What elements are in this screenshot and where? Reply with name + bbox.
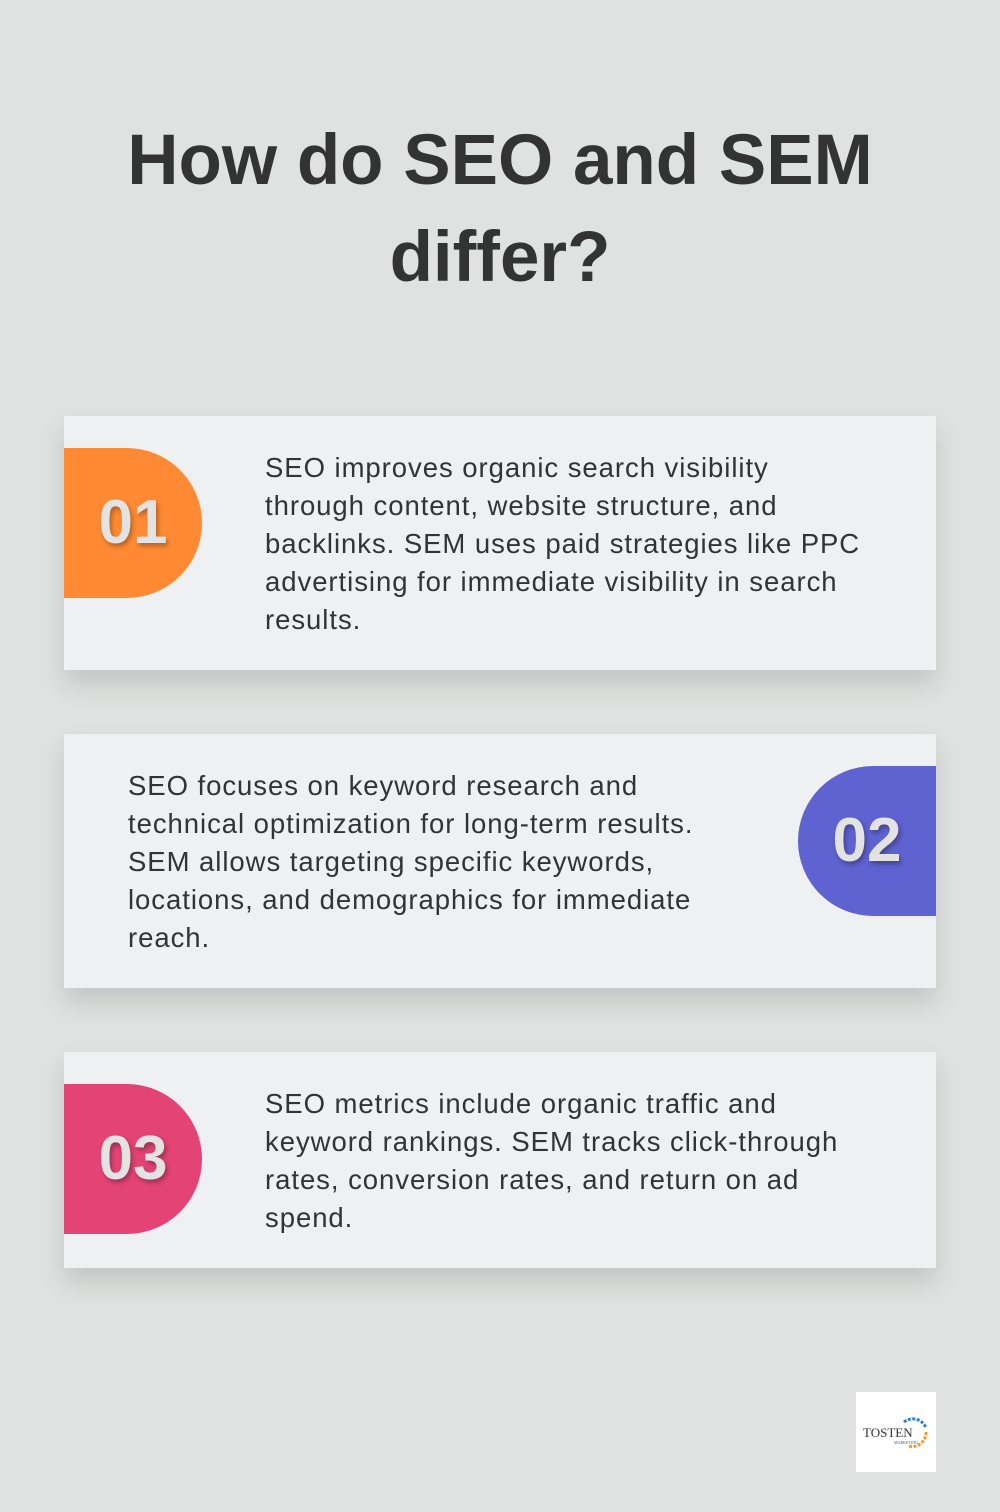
- text block 2: technical optimization for long-term results.: [128, 808, 693, 839]
- badge 03: [64, 1084, 202, 1234]
- text block 1: backlinks. SEM uses paid strategies like PPC: [265, 528, 860, 559]
- badge 02: 02: [833, 806, 901, 875]
- text block 3: SEO metrics include organic traffic and: [265, 1088, 777, 1119]
- panel: card 2: [64, 734, 936, 988]
- badge 03: 03: [99, 1124, 167, 1193]
- text block 2: SEO focuses on keyword research and: [128, 770, 638, 801]
- logo: MARKETING: [894, 1440, 918, 1445]
- text block 1: [265, 452, 860, 635]
- text block 2: [128, 770, 693, 953]
- text block 2: SEM allows targeting specific keywords,: [128, 846, 654, 877]
- badge 01: 01: [99, 488, 167, 557]
- text block 1: SEO improves organic search visibility: [265, 452, 769, 483]
- panel: card 3: [64, 1052, 936, 1268]
- text block 1: through content, website structure, and: [265, 490, 777, 521]
- text block 1: advertising for immediate visibility in search: [265, 566, 838, 597]
- text block 2: reach.: [128, 922, 210, 953]
- text block 3: rates, conversion rates, and return on ad: [265, 1164, 799, 1195]
- logo: TOSTEN: [863, 1425, 913, 1440]
- text block 3: spend.: [265, 1202, 353, 1233]
- title: How do SEO and SEM: [127, 121, 873, 200]
- text block 1: results.: [265, 604, 361, 635]
- title: differ?: [390, 218, 610, 297]
- title: [127, 121, 873, 297]
- badge 01: [64, 448, 202, 598]
- panel: card 1: [64, 416, 936, 670]
- badge 02: [798, 766, 936, 916]
- text block 3: keyword rankings. SEM tracks click-through: [265, 1126, 838, 1157]
- text block 2: locations, and demographics for immediate: [128, 884, 691, 915]
- logo: [856, 1392, 936, 1472]
- text block 3: [265, 1088, 838, 1233]
